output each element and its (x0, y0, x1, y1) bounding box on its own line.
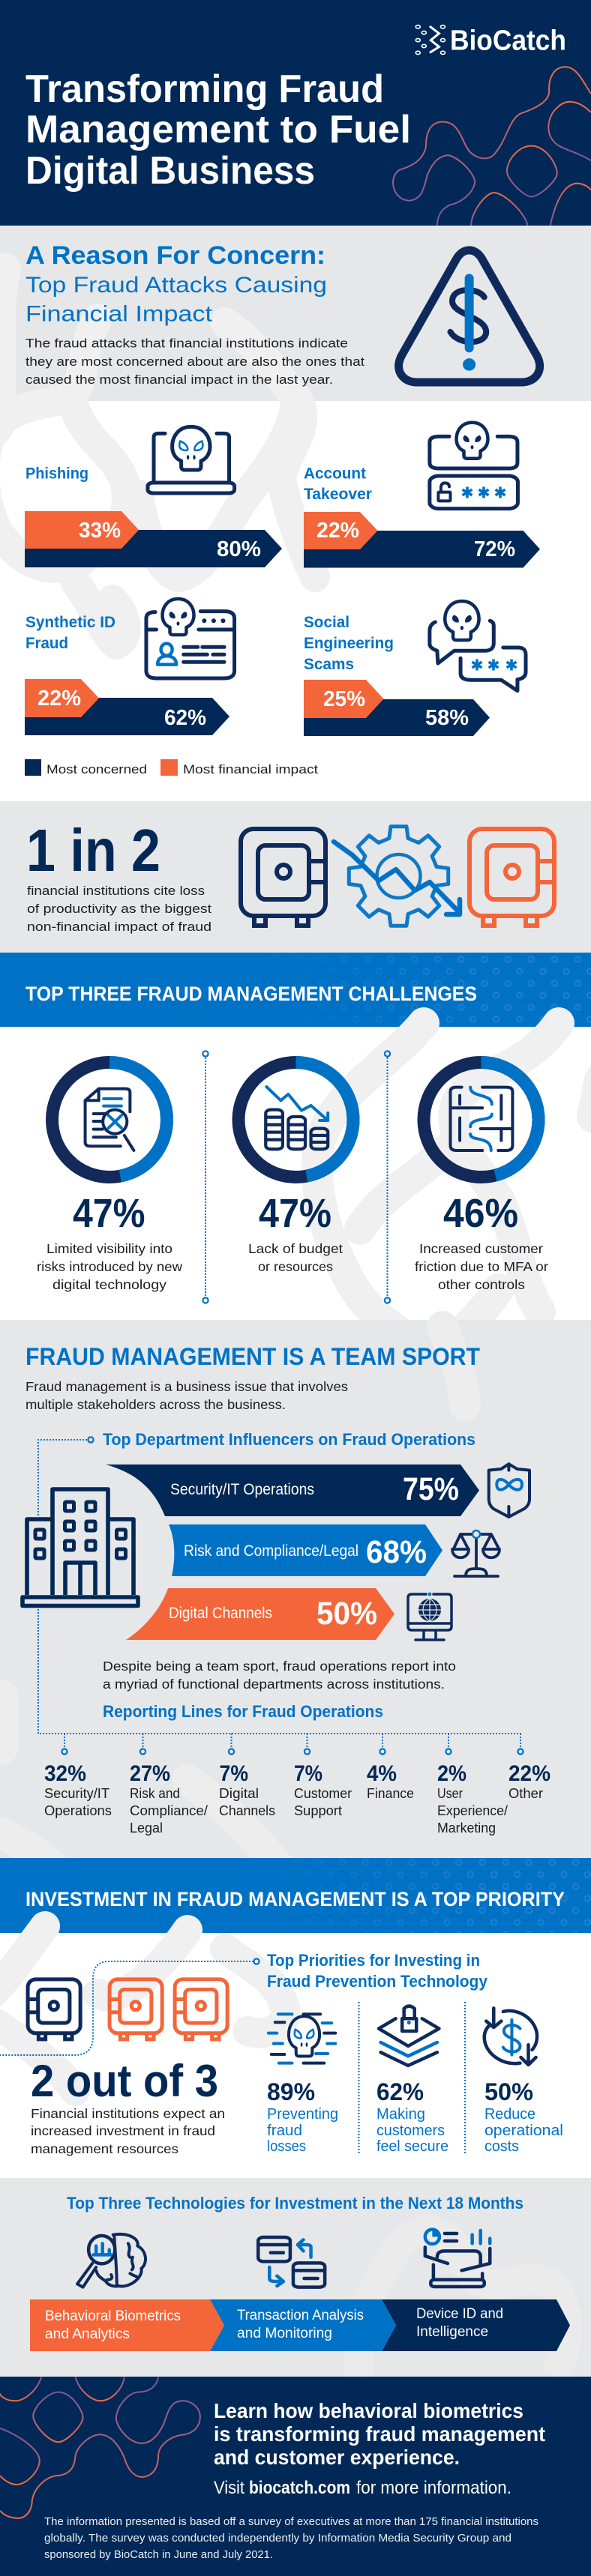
intro text (26, 1379, 348, 1412)
priority: reduce operational costs (484, 2008, 563, 2155)
call to action: is transforming fraud management (214, 2422, 545, 2446)
arrow bar: behavioral biometrics: and Analytics (45, 2326, 130, 2342)
panel: investment (0, 1926, 591, 2178)
bar: risk: Risk and Compliance/Legal (184, 1542, 358, 1560)
icon: secure layers (379, 2006, 439, 2066)
background blobs (0, 1327, 465, 1870)
connector (0, 1961, 254, 2055)
icon: infinity shield (489, 1464, 530, 1517)
panel: challenges band: TOP THREE FRAUD MANAGEMENT CHALLENGES (26, 983, 477, 1005)
stat: ux marketing 2%: Experience/ (437, 1803, 508, 1818)
survey note: sponsored by BioCatch in June and July 2021. (44, 2548, 273, 2561)
priorities heading: Top Priorities for Investing in (267, 1951, 480, 1970)
2 out of 3 text: management resources (31, 2141, 178, 2156)
2 out of 3 text: Financial institutions expect an (31, 2106, 225, 2121)
reporting text (103, 1659, 456, 1692)
stat: finance 4%: 4% (367, 1761, 397, 1786)
priorities heading: Fraud Prevention Technology (267, 1972, 488, 1991)
phishing: Phishing (26, 465, 88, 483)
title: Management to Fuel (26, 108, 411, 151)
social engineering scams: 25% (323, 687, 365, 711)
footer wave decoration (0, 2377, 200, 2518)
priority: making customers feel secure: customers (376, 2123, 445, 2139)
priority: reduce operational costs: costs (484, 2138, 519, 2155)
title: Transforming Fraud (26, 67, 384, 111)
call to action (214, 2399, 545, 2469)
arrow bar: navy device id: Intelligence (416, 2324, 488, 2340)
synthetic id fraud: Synthetic ID (26, 614, 116, 631)
intro text (26, 336, 364, 387)
bar: security: Security/IT Operations (170, 1481, 314, 1498)
stat: ux marketing 2%: 2% (437, 1761, 466, 1786)
stat: customer support 7%: Customer (294, 1786, 352, 1801)
panel: 1 in 2: 1 in 2 (26, 817, 160, 884)
phishing (25, 426, 282, 567)
icon: orange safe (470, 829, 554, 926)
priority: preventing fraud losses: Preventing (267, 2106, 338, 2123)
icon: dollar cycle (484, 2008, 537, 2065)
intro text: Fraud management is a business issue that involves (26, 1379, 348, 1394)
title: Digital Business (26, 149, 315, 193)
challenge: visibility: risks introduced by new (37, 1259, 182, 1274)
icon: id window skull (146, 599, 235, 678)
intro text: multiple stakeholders across the business. (26, 1397, 286, 1412)
intro text: they are most concerned about are also the ones that (26, 355, 364, 369)
stat: digital 7% (219, 1761, 275, 1818)
panel: a reason for concern (0, 226, 591, 801)
stat: security/IT 32%: 32% (44, 1761, 86, 1786)
arrow bar: navy device id: Device ID and (416, 2306, 503, 2322)
intro text: caused the most financial impact in the last year. (26, 372, 333, 387)
stat: customer support 7%: 7% (294, 1761, 322, 1786)
icon: card transfer (258, 2237, 325, 2287)
heading: Top Three Technologies for Investment in the Next 18 Months (67, 2194, 524, 2212)
panel: 1 in 2 (0, 801, 591, 953)
icon: skull with glitch lines (268, 2014, 335, 2063)
1 in 2 text: financial institutions cite loss (27, 884, 205, 898)
survey note: globally. The survey was conducted independently by Information Media Security Group and (44, 2532, 512, 2545)
visit link: for more information. (356, 2478, 512, 2498)
stat: ux marketing 2%: User (437, 1786, 463, 1801)
priority: making customers feel secure: feel secure (376, 2138, 448, 2155)
social engineering scams: 58% (425, 706, 469, 730)
background blobs (317, 1023, 591, 1405)
stat: risk 27% (130, 1761, 208, 1836)
heading: Financial Impact (26, 301, 213, 327)
background blobs (0, 270, 315, 645)
survey note: The information presented is based off a survey of executives at more than 175 financial institutions (44, 2515, 538, 2528)
stat: customer support 7% (294, 1761, 352, 1818)
challenge: friction (415, 1063, 548, 1292)
influencers heading with connector: Top Department Influencers on Fraud Operations (103, 1430, 476, 1449)
2 out of 3 text: increased investment in fraud (31, 2123, 215, 2138)
panel: investment band (0, 1858, 591, 1933)
icon: globe monitor (408, 1593, 452, 1640)
panel: header (0, 0, 591, 226)
synthetic id fraud: Fraud (26, 635, 68, 652)
call to action: and customer experience. (214, 2446, 460, 2469)
reporting text: a myriad of functional departments across institutions. (103, 1677, 445, 1692)
visit link (214, 2478, 512, 2498)
stat: customer support 7%: Support (294, 1803, 342, 1818)
priority: preventing fraud losses: 89% (267, 2078, 315, 2105)
account takeover (304, 423, 540, 568)
stat: digital 7%: Digital (219, 1786, 259, 1801)
stat: other 22%: Other (508, 1786, 543, 1801)
panel: fraud attack bars (25, 423, 540, 776)
bar: digital: 50% (316, 1596, 377, 1632)
panel: investment band: INVESTMENT IN FRAUD MANAGEMENT IS A TOP PRIORITY (26, 1888, 565, 1910)
phishing: 33% (79, 519, 121, 543)
separators (202, 1051, 390, 1303)
icon: building (22, 1489, 138, 1605)
icon: scales (452, 1530, 500, 1576)
synthetic id fraud: 62% (164, 706, 206, 730)
priorities heading (267, 1951, 488, 1991)
donut 46% (424, 1063, 538, 1177)
account takeover: 72% (474, 537, 515, 561)
icon: chat skull (430, 601, 526, 691)
arrow bar: navy device id (382, 2299, 570, 2351)
icon: coins and falling chart (266, 1087, 328, 1149)
heading: FRAUD MANAGEMENT IS A TEAM SPORT (26, 1343, 480, 1370)
bar: digital (126, 1588, 394, 1640)
synthetic id fraud: 22% (38, 687, 81, 711)
2 out of 3 stat: 2 out of 3 (31, 2056, 218, 2106)
bar: digital: Digital Channels (169, 1605, 272, 1622)
visit link: Visit (214, 2478, 244, 2498)
stat: security/IT 32%: Security/IT (44, 1786, 110, 1801)
1 in 2 text: of productivity as the biggest (27, 902, 212, 916)
heading: A Reason For Concern: (26, 241, 326, 270)
account takeover: 22% (316, 519, 359, 543)
stat: finance 4% (367, 1761, 414, 1801)
stat: ux marketing 2% (437, 1761, 508, 1836)
challenge: budget (238, 1063, 353, 1274)
title (26, 67, 411, 193)
legend (25, 759, 318, 776)
1 in 2 text: non-financial impact of fraud (27, 920, 212, 934)
stat: finance 4%: Finance (367, 1786, 414, 1801)
challenge: budget: Lack of budget (248, 1241, 343, 1256)
2 out of 3 text (31, 2106, 225, 2156)
challenge: budget: 47% (259, 1191, 332, 1236)
heading (26, 241, 327, 327)
legend: Most concerned (46, 762, 147, 776)
logo: BioCatch (450, 25, 566, 57)
arrow bar: transaction analysis: Transaction Analysis (237, 2308, 364, 2323)
connector end ring (254, 1958, 260, 1964)
challenge: friction: friction due to MFA or (415, 1259, 548, 1274)
legend: Most financial impact (183, 762, 318, 776)
icon: orange safe (175, 1979, 227, 2039)
logo icon (416, 25, 445, 54)
account takeover: Takeover (304, 486, 372, 503)
arrow bar: behavioral biometrics: Behavioral Biometrics (45, 2308, 181, 2324)
stat: security/IT 32%: Operations (44, 1803, 112, 1818)
challenge: friction: Increased customer (419, 1241, 543, 1256)
reporting text: Despite being a team sport, fraud operations report into (103, 1659, 456, 1674)
priority: preventing fraud losses: losses (267, 2138, 306, 2155)
visit link: biocatch.com (249, 2478, 350, 2498)
challenge: visibility: digital technology (52, 1277, 166, 1292)
header wave decoration (393, 67, 591, 226)
stat: risk 27%: Legal (130, 1821, 163, 1836)
donut 47% (238, 1063, 353, 1177)
social engineering scams (304, 601, 526, 736)
bar: risk (169, 1524, 442, 1576)
priority: making customers feel secure (376, 2006, 448, 2155)
stat: risk 27%: Risk and (130, 1786, 180, 1801)
bar: security: 75% (403, 1471, 459, 1507)
priority: reduce operational costs: 50% (484, 2078, 533, 2105)
challenge: friction: other controls (438, 1277, 525, 1292)
survey note (44, 2515, 538, 2561)
background blobs (0, 1926, 286, 2091)
icon: document magnifier (86, 1089, 134, 1150)
social engineering scams: Engineering (304, 635, 394, 652)
icon: brain and magnifier (77, 2234, 146, 2287)
challenge: visibility: 47% (73, 1191, 146, 1236)
icon: navy safe (241, 829, 326, 926)
reporting connectors (62, 1734, 524, 1755)
priority: preventing fraud losses (267, 2014, 338, 2155)
stat: ux marketing 2%: Marketing (437, 1821, 496, 1836)
stat: digital 7%: 7% (219, 1761, 248, 1786)
challenge: visibility (37, 1063, 182, 1292)
icon: maze (450, 1088, 512, 1150)
icon: password skull (430, 423, 518, 509)
social engineering scams: Scams (304, 656, 354, 673)
stat: security/IT 32% (44, 1761, 112, 1818)
panel: challenges (0, 1023, 591, 1405)
heading: Top Fraud Attacks Causing (26, 273, 327, 298)
stat: other 22%: 22% (508, 1761, 550, 1786)
panel: footer (0, 2377, 591, 2576)
donut 47% (52, 1063, 166, 1177)
account takeover: Account (304, 465, 366, 483)
bar: security (106, 1465, 479, 1516)
background blobs (358, 2230, 567, 2377)
priority: preventing fraud losses: fraud (267, 2123, 302, 2139)
challenge: budget: or resources (258, 1259, 333, 1274)
1 in 2 text (27, 884, 212, 934)
challenge: friction: 46% (443, 1191, 518, 1236)
priority: reduce operational costs: operational (484, 2123, 563, 2139)
panel: challenges band (0, 953, 591, 1027)
stat: risk 27%: Compliance/ (130, 1803, 208, 1818)
call to action: Learn how behavioral biometrics (214, 2399, 524, 2422)
separators (358, 2002, 465, 2153)
influencers heading with connector (38, 1430, 520, 1734)
phishing: 80% (217, 537, 261, 561)
icon: orange safe (110, 1979, 162, 2039)
social engineering scams: Social (304, 614, 350, 631)
intro text: The fraud attacks that financial institutions indicate (26, 336, 348, 351)
synthetic id fraud (25, 599, 235, 735)
icon: one navy safe (28, 1979, 80, 2039)
icon: laptop skull (148, 426, 235, 493)
challenge: visibility: Limited visibility into (46, 1241, 172, 1256)
bar: risk: 68% (366, 1534, 427, 1570)
priority: making customers feel secure: 62% (376, 2078, 424, 2105)
arrow bar: transaction analysis (210, 2299, 396, 2351)
priority: making customers feel secure: Making (376, 2106, 425, 2123)
stat: other 22% (508, 1761, 550, 1801)
icon: gear with falling chart (334, 827, 460, 926)
icon: device analytics (425, 2230, 490, 2287)
icon: warning dollar triangle (399, 250, 540, 382)
panel: team sport (0, 1320, 591, 1870)
reporting heading: Reporting Lines for Fraud Operations (103, 1702, 383, 1721)
arrow bar: behavioral biometrics (30, 2299, 224, 2351)
priority: reduce operational costs: Reduce (484, 2106, 536, 2123)
stat: risk 27%: 27% (130, 1761, 170, 1786)
stat: digital 7%: Channels (219, 1803, 275, 1818)
arrow bar: transaction analysis: and Monitoring (237, 2326, 332, 2341)
panel: top three technologies (0, 2178, 591, 2377)
